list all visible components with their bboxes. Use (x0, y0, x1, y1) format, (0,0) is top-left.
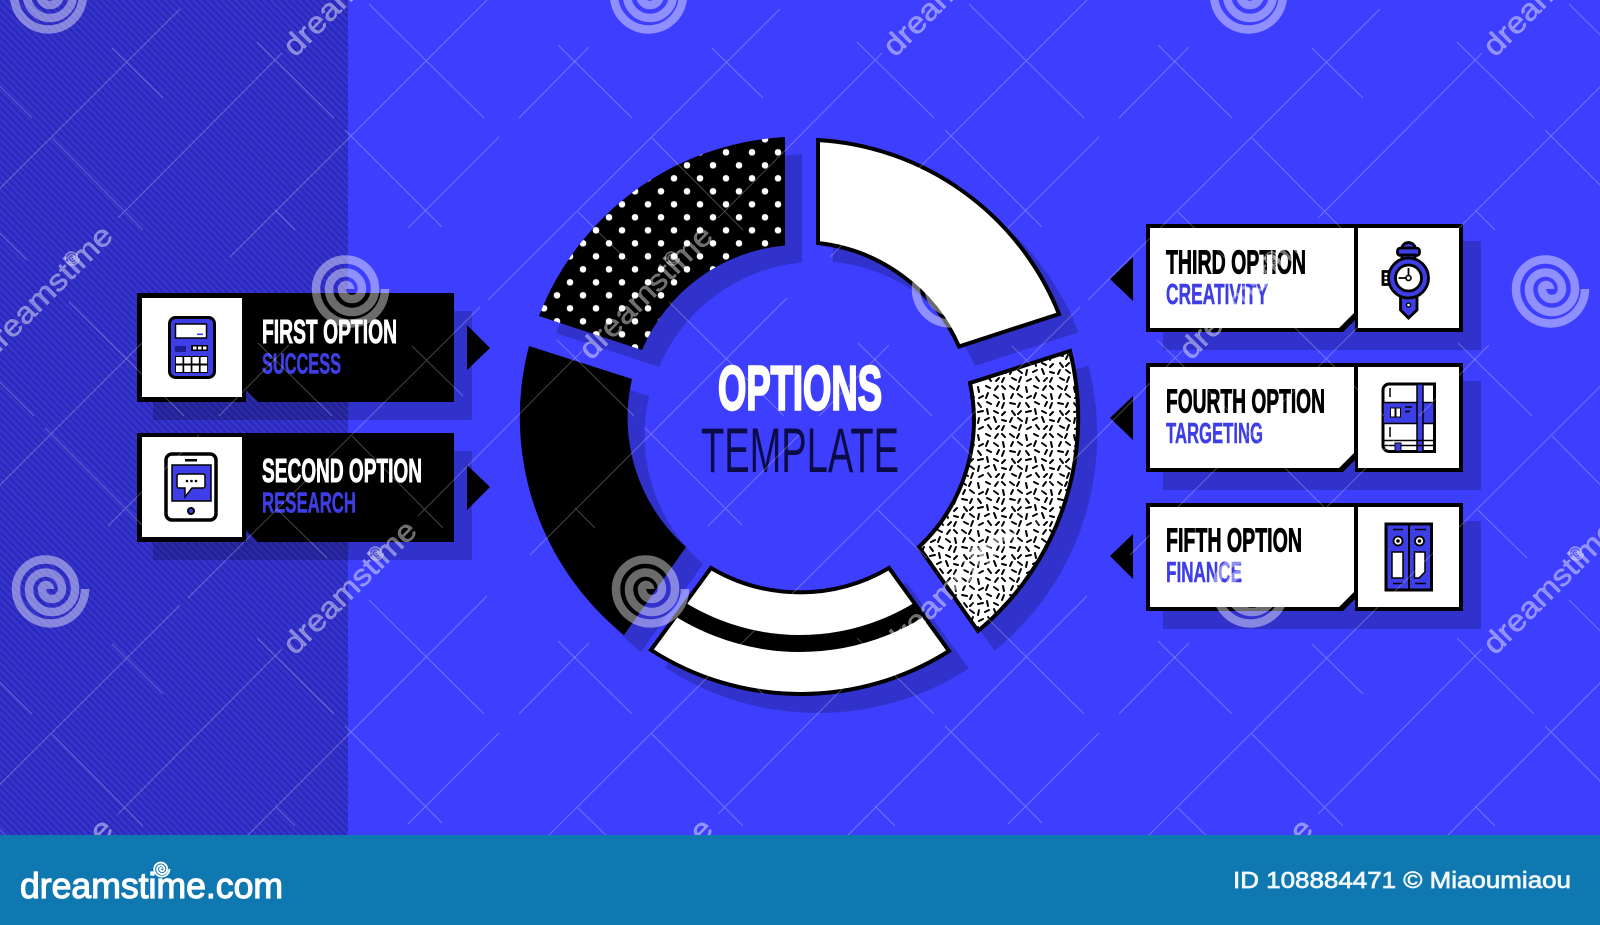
card heading: FIFTH OPTION (1166, 522, 1302, 558)
icon: binders (1386, 524, 1432, 590)
card heading: FIRST OPTION (262, 313, 397, 350)
card: second option (137, 433, 472, 560)
card: fifth option (1146, 503, 1481, 629)
card: first option (137, 293, 472, 420)
title: OPTIONS (718, 354, 882, 424)
title (701, 354, 899, 486)
card label: CREATIVITY (1166, 279, 1268, 311)
footer logo: dreamstime.com (20, 865, 283, 906)
segment: third option, white (818, 140, 1059, 346)
card label: TARGETING (1166, 418, 1263, 450)
icon: pocket watch (1382, 243, 1428, 318)
arrow: fourth option (1110, 396, 1133, 440)
striped left panel (0, 0, 348, 835)
footer credit: ID 108884471 © Miaoumiaou (1233, 867, 1571, 893)
card heading: THIRD OPTION (1166, 244, 1306, 280)
arrow: third option (1110, 257, 1133, 301)
arrow: second option (467, 465, 490, 510)
arrow: fifth option (1110, 534, 1133, 579)
segment: second option, polka dots (539, 137, 785, 350)
arrow: first option (467, 325, 490, 370)
footer bar (0, 835, 1600, 925)
card label: RESEARCH (262, 488, 356, 520)
ring drop shadow (537, 154, 1095, 711)
card: third option (1146, 224, 1481, 350)
card label: SUCCESS (262, 348, 341, 380)
icon: tablet with speech bubble (166, 454, 216, 520)
donut chart (520, 137, 1078, 694)
icon: calculator (170, 318, 214, 378)
segment: first option, solid black (520, 346, 686, 635)
card heading: FOURTH OPTION (1166, 382, 1325, 420)
segment: fifth option, striped (648, 565, 952, 696)
card heading: SECOND OPTION (262, 452, 422, 489)
subtitle: TEMPLATE (701, 416, 899, 486)
card: fourth option (1146, 363, 1481, 490)
segment: fourth option, dash pattern (919, 351, 1078, 631)
icon: book with strap (1383, 384, 1434, 452)
card label: FINANCE (1166, 557, 1242, 589)
